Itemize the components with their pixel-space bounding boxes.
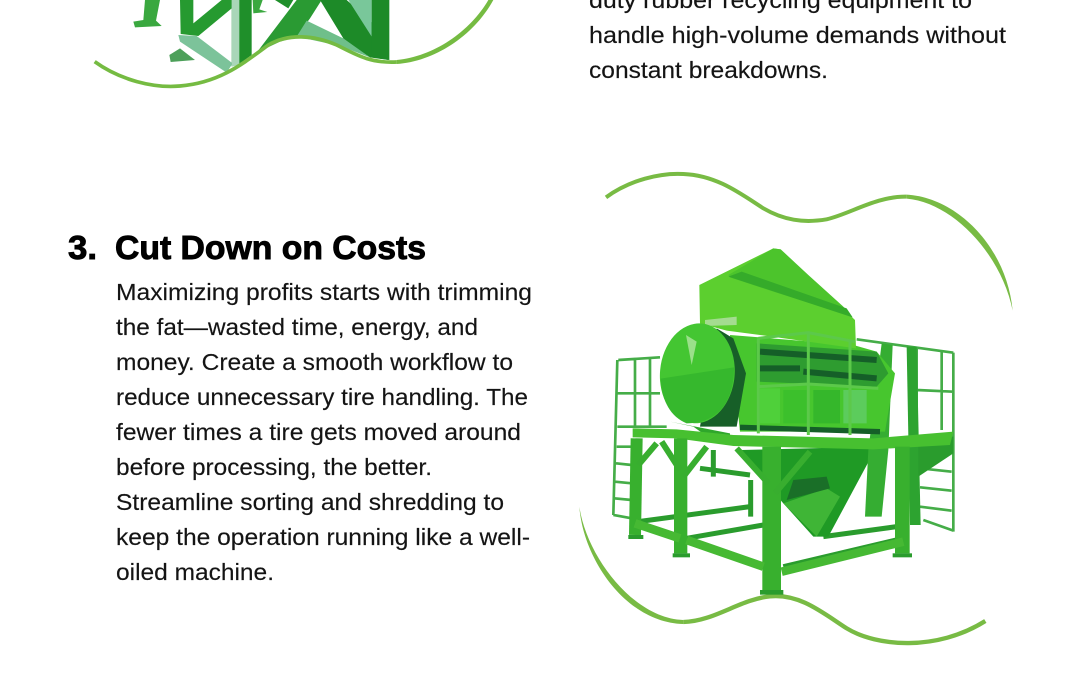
heading: 3. Cut Down on Costs: Cut Down on Costs (115, 229, 426, 266)
hopper (742, 447, 877, 537)
text: cut down on costs paragraph: money. Create a smooth workflow to (116, 349, 513, 375)
legs and braces (635, 438, 903, 592)
heading: 3. Cut Down on Costs: 3. (68, 229, 97, 266)
drum (656, 320, 746, 443)
text: cut down on costs paragraph: reduce unnecessary tire handling. The (116, 384, 528, 410)
text: cut down on costs paragraph: fewer times a tire gets moved around (116, 419, 521, 445)
curve: top wave (606, 174, 1013, 311)
curve: bottom wave (579, 507, 985, 643)
front railing (758, 333, 878, 435)
text: cut down on costs paragraph: oiled machine. (116, 559, 274, 585)
right side supports (865, 343, 893, 517)
image: top-left machine fragment in wavy frame (95, 0, 493, 86)
back frame (638, 450, 903, 567)
text: cut down on costs paragraph: the fat—wasted time, energy, and (116, 314, 478, 340)
text: top-right paragraph end: constant breakdowns. (589, 57, 828, 83)
text: cut down on costs paragraph: Maximizing profits starts with trimming (116, 279, 532, 305)
text: top-right paragraph end: handle high-volume demands without (589, 22, 1007, 48)
text: cut down on costs paragraph: before processing, the better. (116, 454, 432, 480)
text: cut down on costs paragraph: keep the operation running like a well- (116, 524, 530, 550)
text: cut down on costs paragraph (116, 279, 532, 585)
leg feet (628, 535, 912, 595)
platform beam (633, 428, 953, 449)
shredder body (730, 335, 895, 432)
right stairs and railings (857, 339, 953, 532)
text: top-right paragraph end (589, 0, 1007, 83)
text: cut down on costs paragraph: Streamline sorting and shredding to (116, 489, 504, 515)
hood (699, 248, 856, 348)
left stairs and railings (613, 357, 667, 518)
curve: top-left wave (95, 0, 493, 86)
image: green tire shredder machine in wavy frame (579, 174, 1013, 643)
